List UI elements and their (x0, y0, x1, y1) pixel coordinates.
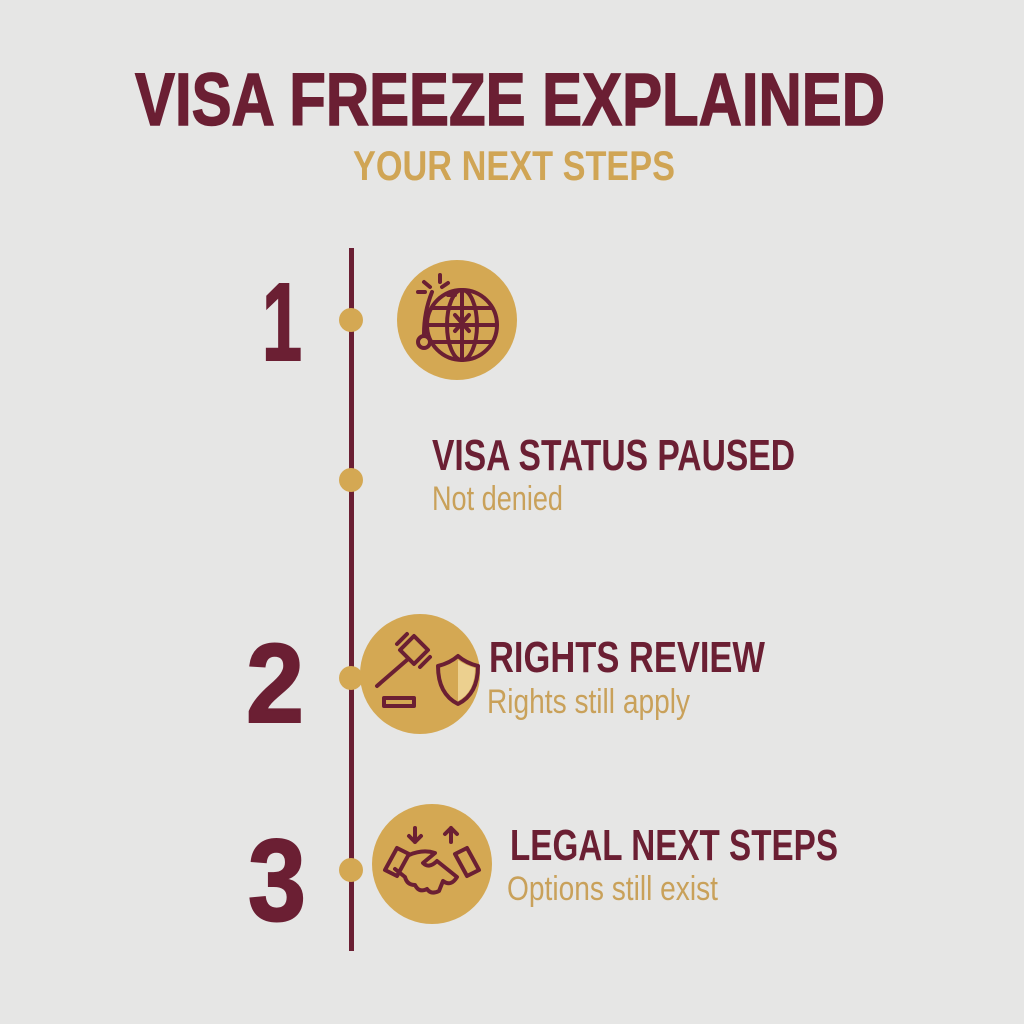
step 2 text: RIGHTS REVIEW (489, 633, 765, 682)
number 1: 1 (262, 261, 302, 384)
step 1 text (432, 431, 795, 518)
step 1 text: VISA STATUS PAUSED (432, 431, 795, 480)
step 3 text: Options still exist (507, 870, 718, 908)
number 3: 3 (248, 815, 306, 945)
step 3 text (507, 821, 838, 908)
subtitle: YOUR NEXT STEPS (353, 142, 675, 189)
icon: handshake (372, 804, 492, 924)
step 3 text: LEGAL NEXT STEPS (510, 821, 838, 870)
timeline line (339, 248, 363, 951)
step 1 text: Not denied (432, 480, 563, 518)
number 2: 2 (246, 621, 304, 746)
step 2 text (487, 633, 765, 721)
step 2 text: Rights still apply (487, 683, 690, 721)
icon: gavel and shield (360, 614, 480, 734)
icon: globe (397, 260, 517, 380)
